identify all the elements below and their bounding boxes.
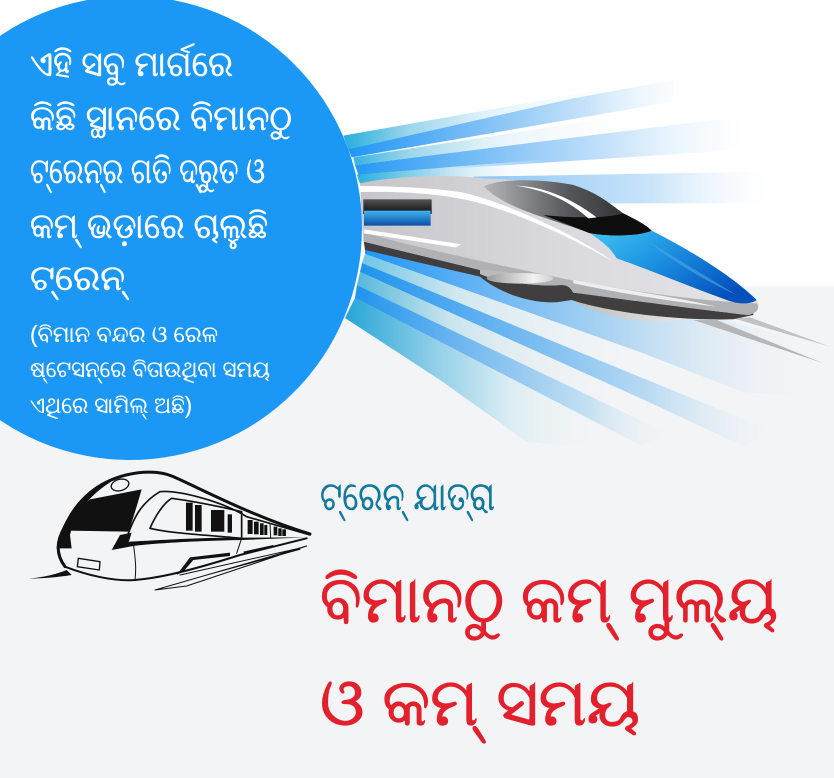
headline: less cost and time: [320, 562, 778, 743]
underside: [573, 302, 707, 322]
side window frame: [150, 498, 242, 538]
blue nose: [590, 231, 757, 303]
roof outline: [58, 472, 310, 567]
body shell: [360, 176, 759, 315]
text block: main message: [30, 43, 292, 300]
dark skirt: [363, 238, 753, 319]
headlight wedge: [112, 533, 132, 550]
front plate: [77, 558, 100, 570]
nose white line: [573, 280, 717, 307]
text block: note: ଏଥିରେ ସାମିଲ୍ ଅଛି): [30, 392, 192, 419]
front pillar: [57, 478, 117, 548]
text block: main message: ଟ୍ରେନ୍: [30, 257, 129, 300]
lower white stripe: [364, 229, 462, 247]
door lines: [133, 512, 271, 580]
windshield highlight: [515, 186, 597, 218]
windshield dark area: [543, 213, 652, 235]
nose streak: [648, 242, 737, 295]
headline: less cost and time: ବିମାନଠୁ କମ୍ ମୁଲ୍ୟ: [320, 562, 778, 640]
speed rays: upper: [343, 80, 770, 203]
wheel cover: [480, 270, 553, 284]
heading: train journey: ଟ୍ରେନ୍ ଯାତ୍ରା: [320, 475, 495, 521]
text block: main message: ଏହି ସବୁ ମାର୍ଗରେ: [30, 43, 233, 87]
track shadows: [693, 317, 830, 363]
ground wedge: [29, 570, 72, 579]
text block: note: (ବିମାନ ବନ୍ଦର ଓ ରେଳ: [30, 321, 218, 347]
white body stripe: [360, 186, 615, 263]
side window: [363, 199, 432, 226]
cab divider: [128, 491, 310, 535]
text block: note: [30, 321, 270, 419]
text block: main message: ଟ୍ରେନ୍‌ର ଗତି ଦ୍ରୁତ ଓ: [30, 150, 265, 194]
passenger windows: [186, 503, 286, 536]
windscreen: [67, 489, 142, 532]
lower shell band: [364, 233, 758, 315]
text block: note: ଷ୍ଟେସନ୍‌ରେ ବିତାଉଥିବା ସମୟ: [30, 356, 270, 383]
speed rays: lower: [345, 250, 800, 448]
lower outline: [65, 538, 307, 580]
panel: blue circle: [0, 0, 362, 460]
headline: less cost and time: ଓ କମ୍ ସମୟ: [320, 665, 640, 743]
icon: line-art train: [29, 472, 310, 590]
rails: [155, 546, 307, 590]
bogie: [177, 545, 273, 575]
cabin window: [484, 180, 652, 236]
text block: main message: କମ୍ ଭଡ଼ାରେ ଚାଲୁଛି: [30, 205, 268, 249]
lower grey background: [0, 286, 834, 778]
roof lamp: [110, 477, 130, 493]
waist band: [112, 537, 307, 550]
text block: main message: କିଛି ସ୍ଥାନରେ ବିମାନଠୁ: [30, 97, 292, 141]
bullet train illustration: [360, 176, 830, 363]
